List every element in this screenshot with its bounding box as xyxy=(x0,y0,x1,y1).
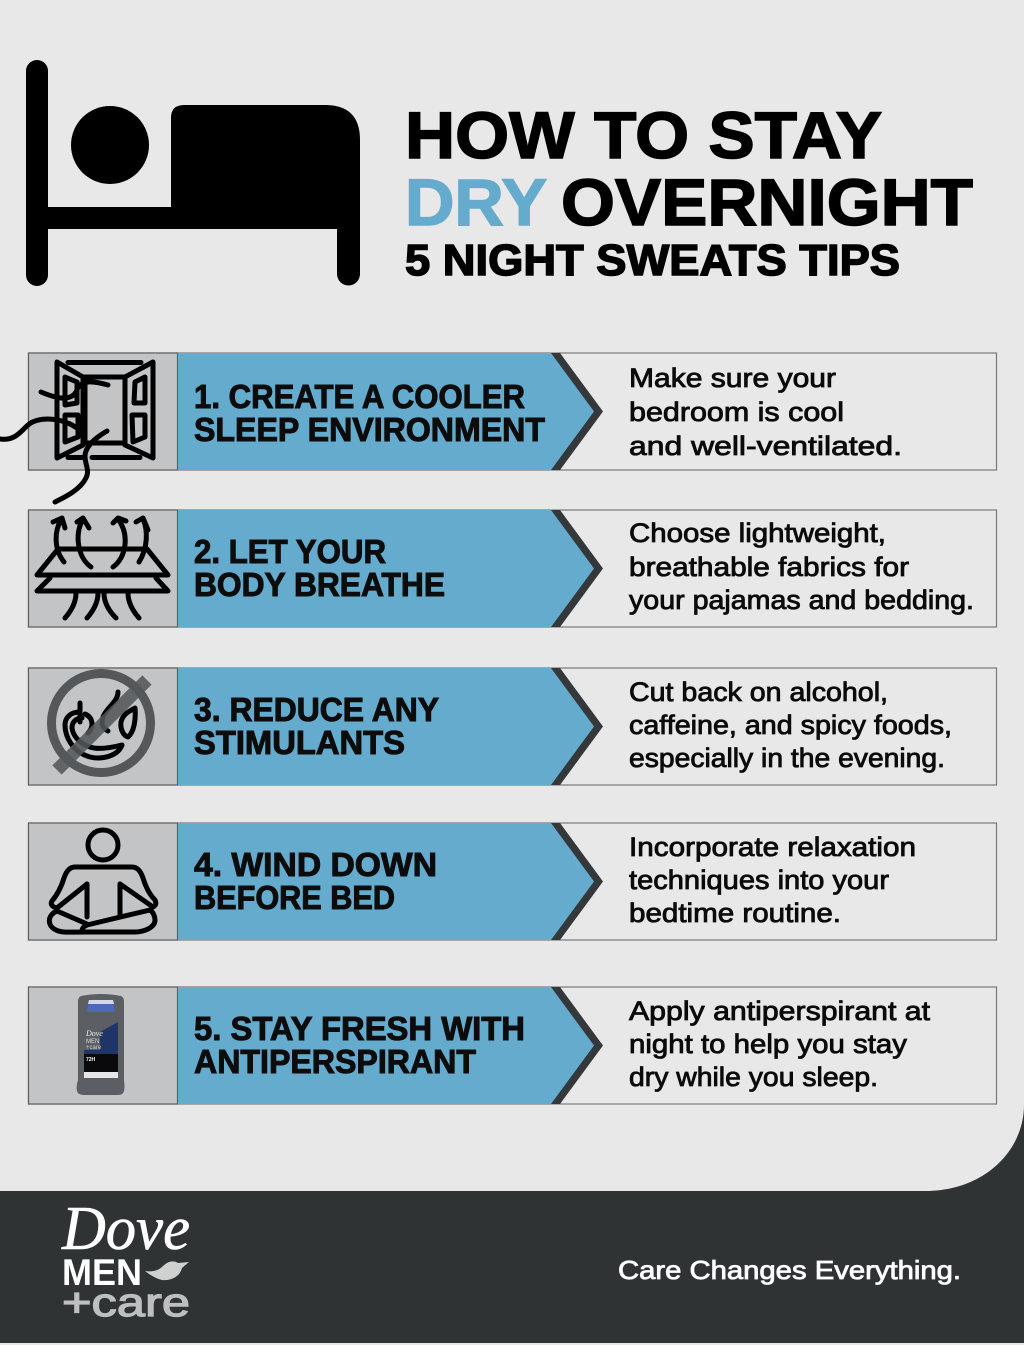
logo: Dove Men+Care xyxy=(61,1195,190,1325)
heading: tip 5: ANTIPERSPIRANT xyxy=(194,1043,476,1080)
icon: antiperspirant stick: 72H xyxy=(86,1057,96,1063)
icon: dove bird xyxy=(145,1261,189,1280)
panel: tip 5 xyxy=(28,987,996,1104)
title: DRY xyxy=(405,165,547,239)
text: tip 5: dry while you sleep. xyxy=(629,1062,878,1092)
text: tip 4: bedtime routine. xyxy=(629,898,841,928)
text: tip 3: caffeine, and spicy foods, xyxy=(629,710,952,740)
icon: antiperspirant stick: MEN xyxy=(86,1039,99,1045)
text: tip 2: Choose lightweight, xyxy=(629,518,886,548)
icon: open window with breeze xyxy=(0,362,153,502)
text: tip 3 xyxy=(629,677,952,773)
text: tip 3: especially in the evening. xyxy=(629,743,945,773)
text: tip 2: your pajamas and bedding. xyxy=(629,585,974,615)
heading: tip 1: 1. CREATE A COOLER xyxy=(194,378,525,415)
icon: bed xyxy=(26,60,360,286)
heading: tip 3 xyxy=(194,691,439,761)
logo: Dove Men+Care: MEN xyxy=(62,1252,142,1293)
heading: tip 4 xyxy=(194,846,437,916)
title xyxy=(405,98,973,285)
icon: meditating person xyxy=(49,830,156,932)
heading: tip 3: STIMULANTS xyxy=(194,724,405,761)
tagline: Care Changes Everything. xyxy=(618,1255,961,1285)
heading: tip 2: 2. LET YOUR xyxy=(194,533,386,570)
panel: tip 4 xyxy=(28,823,996,940)
title: 5 NIGHT SWEATS TIPS xyxy=(405,236,900,285)
footer band xyxy=(0,1105,1024,1345)
heading: tip 1: SLEEP ENVIRONMENT xyxy=(194,411,545,448)
icon: antiperspirant stick: Dove xyxy=(85,1029,103,1038)
heading: tip 4: BEFORE BED xyxy=(194,879,395,916)
heading: tip 2: BODY BREATHE xyxy=(194,566,445,603)
logo: Dove Men+Care: Dove xyxy=(61,1195,190,1263)
logo: Dove Men+Care: +care xyxy=(62,1281,190,1325)
title: OVERNIGHT xyxy=(561,165,973,239)
text: tip 2: breathable fabrics for xyxy=(629,552,909,582)
text: tip 4: techniques into your xyxy=(629,865,889,895)
heading: tip 5 xyxy=(194,1010,525,1080)
text: tip 5 xyxy=(629,996,931,1092)
heading: tip 5: 5. STAY FRESH WITH xyxy=(194,1010,525,1047)
text: tip 3: Cut back on alcohol, xyxy=(629,677,888,707)
text: tip 5: Apply antiperspirant at xyxy=(629,996,931,1026)
icon: antiperspirant stick xyxy=(77,994,124,1095)
title: HOW TO STAY xyxy=(405,98,882,172)
text: tip 1: bedroom is cool xyxy=(629,397,844,427)
panel: tip 1 xyxy=(28,353,996,470)
heading: tip 2 xyxy=(194,533,445,603)
icon: antiperspirant stick: +care xyxy=(86,1045,102,1051)
panel: tip 3 xyxy=(28,668,996,785)
text: tip 4: Incorporate relaxation xyxy=(629,832,916,862)
heading: tip 4: 4. WIND DOWN xyxy=(194,846,437,883)
text: tip 4 xyxy=(629,832,916,928)
icon: breathable fabric layers xyxy=(37,518,168,618)
heading: tip 3: 3. REDUCE ANY xyxy=(194,691,439,728)
panel: tip 2 xyxy=(28,510,996,627)
text: tip 1: Make sure your xyxy=(629,363,836,393)
icon: no spicy food xyxy=(52,674,150,772)
text: tip 1: and well-ventilated. xyxy=(629,431,902,461)
text: tip 2 xyxy=(629,518,974,615)
heading: tip 1 xyxy=(194,378,545,448)
text: tip 5: night to help you stay xyxy=(629,1029,908,1059)
text: tip 1 xyxy=(629,363,902,461)
